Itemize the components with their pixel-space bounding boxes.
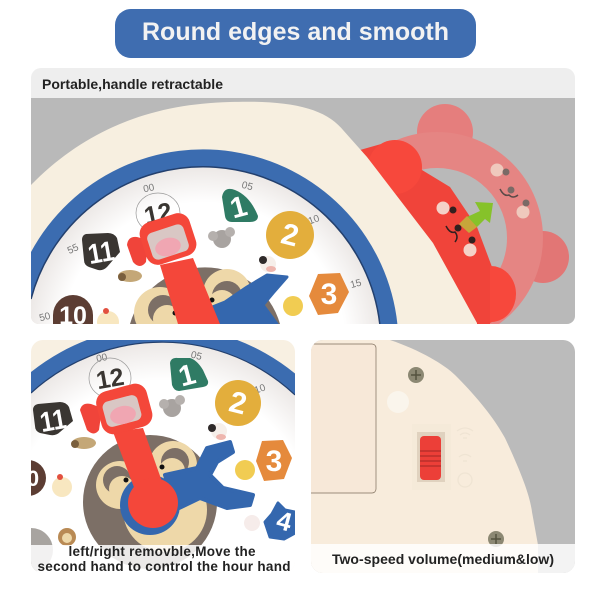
hour 11: 11 — [38, 403, 69, 438]
handle faces — [436, 164, 530, 256]
hour 3: 3 — [266, 445, 282, 478]
panel header: Portable,handle retractable — [42, 76, 223, 92]
minute labels: 05 — [240, 180, 254, 193]
hour 3: 3 — [321, 278, 337, 311]
screw top — [408, 367, 424, 383]
screw bottom — [488, 531, 504, 547]
hour 12: 12 — [94, 363, 126, 395]
hour 4: 4 — [273, 505, 296, 538]
minute labels — [38, 180, 363, 324]
caption: removable hands: left/right removble,Move the — [68, 544, 256, 559]
hour 2 — [215, 380, 261, 426]
hour 10: 0 — [27, 466, 39, 491]
minute labels: 10 — [253, 382, 268, 397]
minute labels: 55 — [66, 242, 81, 257]
hour 3 — [309, 273, 349, 315]
volume icons — [457, 428, 473, 487]
hour 10 — [31, 460, 46, 496]
handle: retracted ghost — [396, 104, 569, 324]
hour 12 — [89, 358, 131, 398]
red second hand — [127, 210, 220, 324]
blue ring — [31, 149, 397, 324]
minute labels: 50 — [38, 311, 52, 324]
panel header — [31, 68, 575, 98]
minute labels: 15 — [349, 277, 363, 291]
hour 3 — [256, 440, 292, 481]
toy back body — [311, 340, 538, 573]
hour 1: 1 — [175, 358, 199, 394]
hour 2 — [266, 211, 314, 259]
hour 2: 2 — [278, 217, 302, 254]
hour 12 — [136, 192, 180, 227]
clock face — [31, 342, 295, 545]
hour 9 — [31, 528, 53, 572]
hour 12: 12 — [142, 197, 175, 231]
panel: portable handle — [31, 68, 575, 339]
blue ring — [31, 340, 295, 394]
battery door — [311, 344, 376, 493]
hour 10 — [53, 295, 93, 324]
hour 11: 11 — [86, 235, 117, 270]
bear dial — [130, 267, 280, 324]
caption: volume — [311, 544, 575, 573]
title banner — [115, 9, 476, 58]
minute labels: 00 — [142, 182, 156, 195]
hour 1 — [222, 189, 258, 225]
blue hour hand — [120, 442, 253, 535]
panel: volume switch — [311, 340, 575, 573]
hour 4 — [265, 503, 296, 539]
clock body — [31, 102, 477, 324]
hour 2: 2 — [226, 385, 250, 422]
bear dial — [83, 435, 217, 569]
minute labels: 10 — [307, 213, 322, 227]
hour 1: 1 — [227, 190, 251, 225]
volume switch — [412, 424, 451, 490]
blue hour hand — [212, 274, 288, 324]
panel: removable hands — [31, 340, 295, 572]
hour 1 — [170, 358, 208, 394]
caption: removable hands — [31, 545, 290, 571]
hour 10: 10 — [59, 302, 87, 330]
caption: volume: Two-speed volume(medium&low) — [332, 551, 554, 567]
product photo: clock and handle — [31, 98, 575, 339]
minute labels: 00 — [95, 352, 109, 365]
caption: removable hands: second hand to control the hour hand — [38, 559, 290, 574]
title banner: Round edges and smooth — [142, 18, 449, 46]
red second hand — [80, 381, 178, 528]
handle: extended red — [360, 140, 516, 324]
icon: green arrow — [459, 202, 493, 233]
minute labels: 05 — [189, 350, 203, 363]
icons: animals — [97, 227, 303, 333]
clock face — [31, 167, 380, 339]
round button — [387, 391, 409, 413]
icons: animals — [52, 395, 260, 546]
minute labels — [96, 351, 266, 393]
